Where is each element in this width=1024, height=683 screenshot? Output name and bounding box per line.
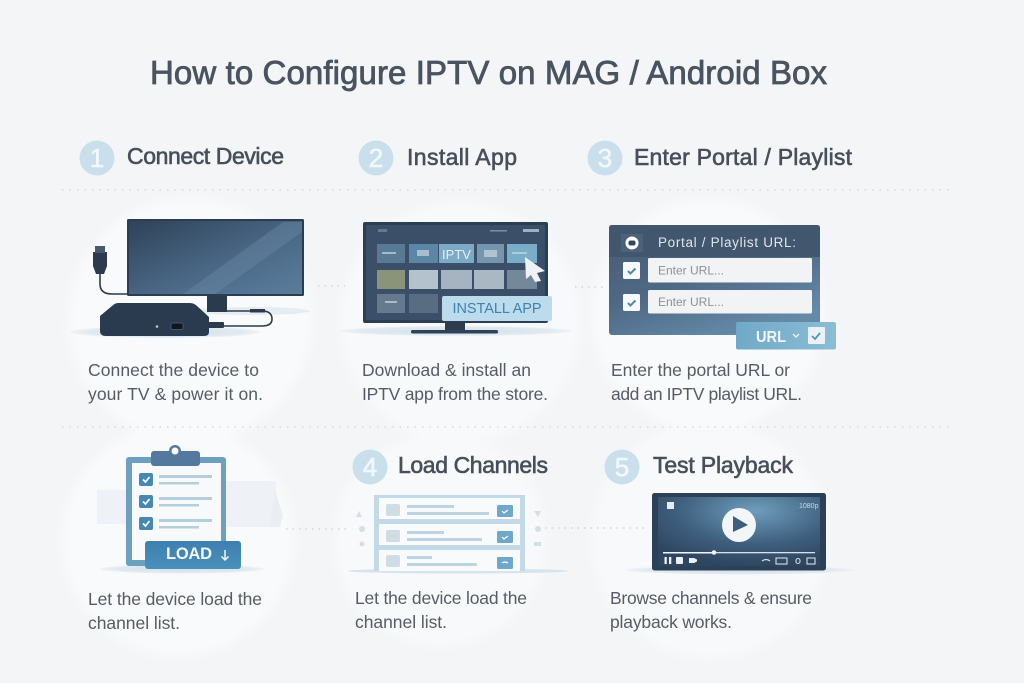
- icon: URL form: [609, 225, 836, 350]
- tile: IPTV: [439, 244, 474, 263]
- step 1 heading: 1: [90, 143, 104, 173]
- icon: video player: [625, 493, 855, 574]
- load button: LOAD: [166, 545, 212, 563]
- step 4 heading: [352, 450, 548, 484]
- step 2 description: [362, 360, 548, 404]
- step 2 description: IPTV app from the store.: [362, 384, 548, 404]
- icon: monitor and set-top box: [70, 219, 310, 338]
- step 3 heading: Enter Portal / Playlist: [634, 144, 853, 170]
- panel: step 5 test playback: [604, 450, 855, 632]
- step 1 description: your TV & power it on.: [88, 384, 263, 404]
- panel: step 2 install app: [340, 140, 572, 404]
- step 3 description: add an IPTV playlist URL.: [611, 384, 802, 404]
- step 5 heading: [604, 450, 794, 484]
- icon: cursor: [525, 257, 545, 282]
- install app button: [442, 296, 552, 321]
- step 5 heading: 5: [615, 452, 629, 482]
- icon: clipboard with load button: [97, 445, 283, 574]
- panel: step 4 load channels: [348, 450, 568, 632]
- step 4 description: Let the device load the: [355, 588, 527, 608]
- step 5 description: playback works.: [610, 612, 732, 632]
- icon: video player: 1080p: [799, 503, 819, 510]
- icon: URL form: Portal / Playlist URL:: [658, 235, 796, 250]
- step 2 description: Download & install an: [362, 360, 531, 380]
- step 1 heading: [80, 140, 284, 176]
- title: How to Configure IPTV on MAG / Android Box: [150, 54, 828, 91]
- step 3 heading: [588, 140, 853, 176]
- step 4 heading: Load Channels: [398, 452, 548, 478]
- load list description: Let the device load the: [88, 589, 262, 609]
- step 3 description: Enter the portal URL or: [611, 360, 790, 380]
- URL input 1: [648, 258, 812, 282]
- play button: [722, 508, 756, 542]
- panel: step 1 connect device: [70, 140, 310, 404]
- URL button: URL: [756, 329, 786, 346]
- step 3 heading: 3: [598, 143, 612, 173]
- load button: [145, 541, 241, 569]
- URL input 2: Enter URL...: [658, 295, 724, 309]
- step 5 heading: Test Playback: [653, 452, 794, 478]
- step 1 description: [88, 360, 263, 404]
- step 4 description: [355, 588, 527, 632]
- step 4 heading: 4: [363, 452, 377, 482]
- install app button: INSTALL APP: [452, 301, 542, 317]
- icon: TV with app grid: [340, 222, 572, 336]
- load list description: channel list.: [88, 613, 180, 633]
- step 1 description: Connect the device to: [88, 360, 259, 380]
- panel: step 3 enter portal: [588, 140, 853, 404]
- step 3 description: [611, 360, 802, 404]
- tile: IPTV: IPTV: [442, 247, 471, 262]
- load list description: [88, 589, 262, 633]
- step 2 heading: Install App: [407, 144, 517, 170]
- URL button: [736, 322, 836, 350]
- step 5 description: [610, 588, 812, 632]
- URL input 1: Enter URL...: [658, 264, 724, 278]
- step 1 heading: Connect Device: [127, 143, 284, 169]
- step 4 description: channel list.: [355, 612, 447, 632]
- panel: load list: [88, 445, 283, 633]
- step 5 description: Browse channels & ensure: [610, 588, 812, 608]
- URL input 2: [648, 290, 812, 314]
- step 2 heading: 2: [369, 143, 383, 173]
- icon: channel list: [348, 495, 568, 574]
- step 2 heading: [358, 140, 517, 176]
